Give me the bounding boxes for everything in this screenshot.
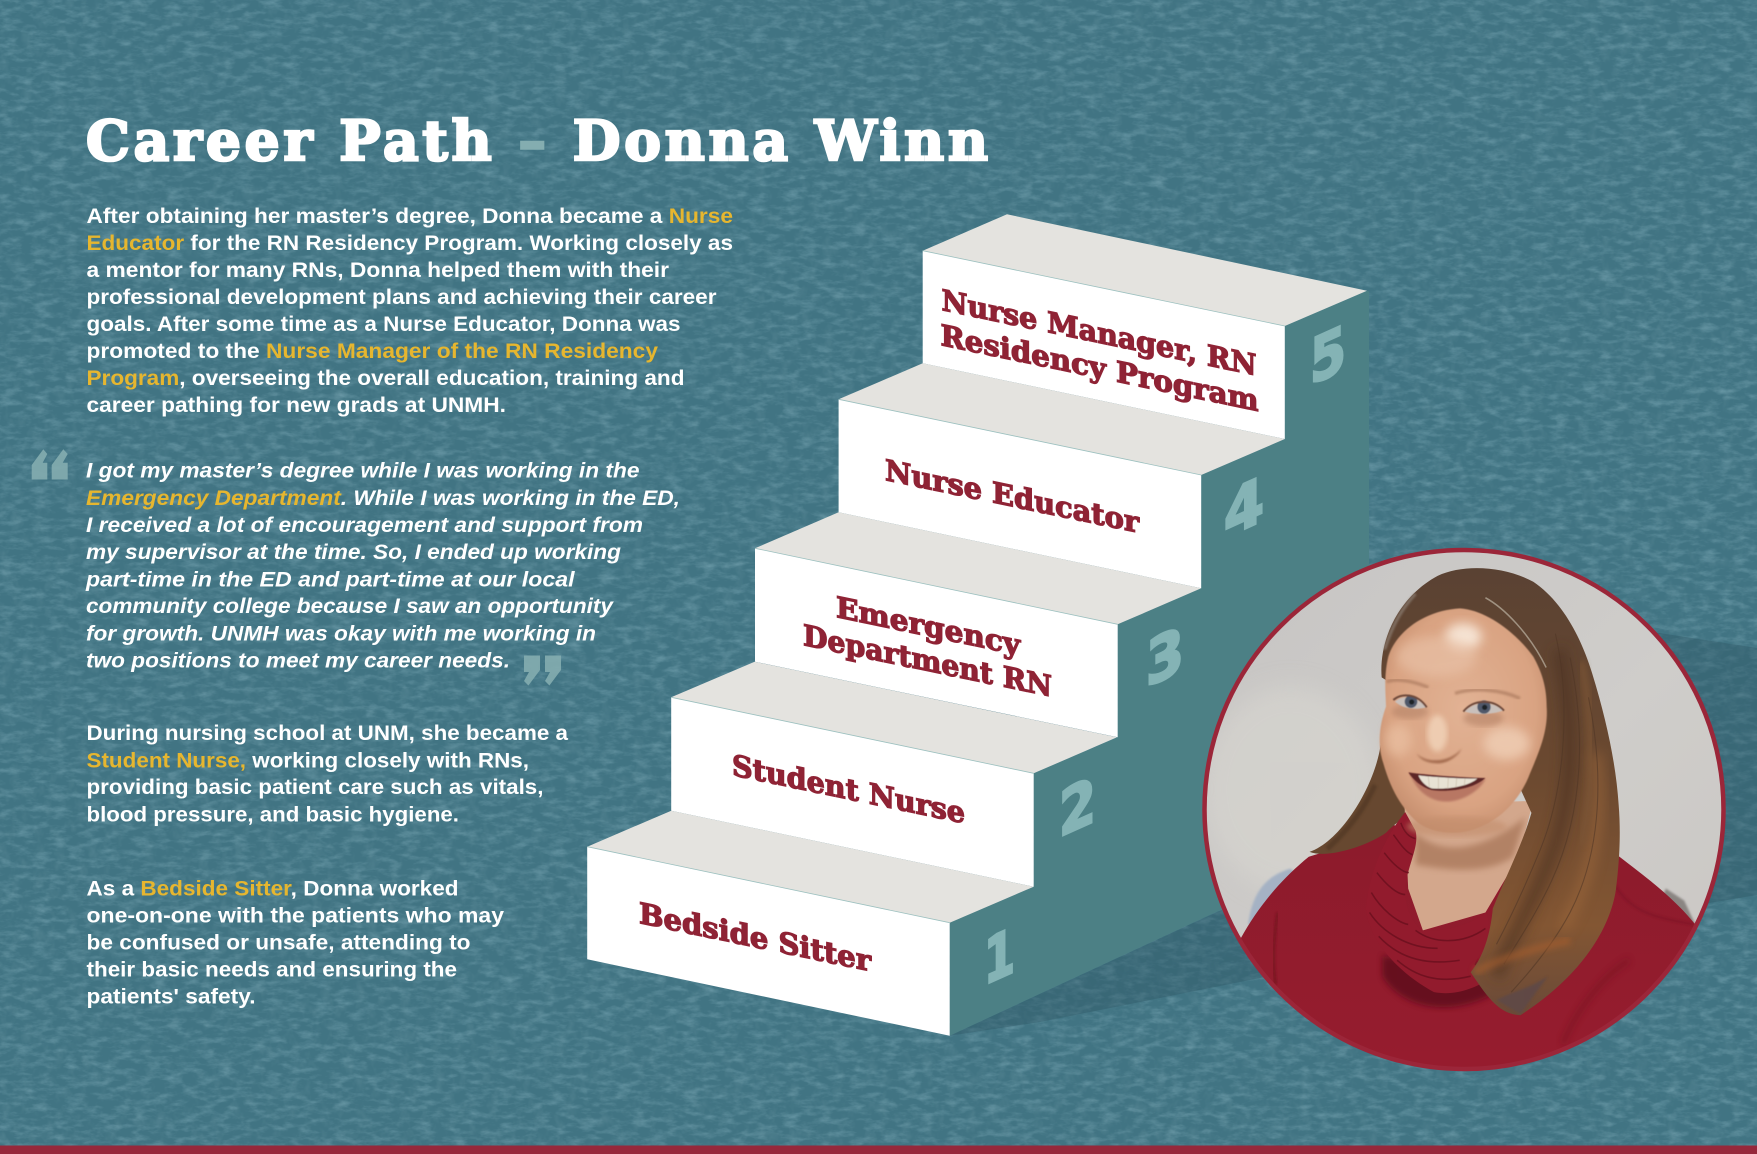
neck — [1404, 801, 1533, 930]
title: Career Path – Donna Winn — [86, 108, 988, 173]
text block: quote: Emergency Department . While I was working in the ED, — [86, 486, 680, 510]
text block: nurse manager and educator: After obtaining her master’s degree, Donna became a Nurse — [86, 204, 733, 228]
text block: nurse manager and educator: promoted to the Nurse Manager of the RN Residency — [86, 339, 658, 363]
text block: quote: two positions to meet my career needs. — [86, 648, 510, 672]
step 3: emergency department rn: 3 — [1146, 614, 1184, 702]
step 4: nurse educator: 4 — [1224, 464, 1264, 553]
staircase — [587, 214, 1369, 1036]
step 5: nurse manager — [923, 214, 1367, 439]
eyebrows — [1387, 680, 1428, 687]
step 2: student nurse: 2 — [1059, 764, 1096, 852]
stair cast shadow — [950, 590, 1757, 1036]
text block: bedside sitter: one-on-one with the patients who may — [86, 904, 504, 928]
text block: student nurse: providing basic patient care such as vitals, — [86, 775, 544, 799]
nose — [1427, 715, 1447, 752]
text block: quote: I got my master’s degree while I was working in the — [86, 458, 640, 482]
face — [1380, 608, 1547, 833]
text block: bedside sitter: be confused or unsafe, attending to — [86, 930, 470, 954]
text block: nurse manager and educator: Program, overseeing the overall education, training and — [86, 366, 684, 390]
text block: bedside sitter: their basic needs and ensuring the — [86, 958, 457, 982]
cowl neck — [1382, 956, 1500, 1007]
text block: quote: community college because I saw an opportunity — [86, 594, 614, 618]
text block: nurse manager and educator: Educator for the RN Residency Program. Working closely as — [86, 231, 733, 255]
step 4: nurse educator — [839, 363, 1285, 588]
step 2: student nurse: Student Nurse — [732, 747, 965, 830]
text block: bedside sitter — [86, 876, 504, 1008]
step 3: emergency department rn: Emergency — [836, 589, 1021, 662]
text block: quote — [85, 458, 680, 672]
text block: nurse manager and educator: goals. After some time as a Nurse Educator, Donna was — [86, 312, 681, 336]
step 5: nurse manager: Nurse Manager, RN — [942, 282, 1256, 382]
smile — [1409, 773, 1486, 802]
step 2: student nurse — [671, 662, 1117, 887]
text block: student nurse — [86, 721, 569, 826]
portrait photo of Donna Winn — [1200, 545, 1730, 1088]
step 4: nurse educator: Nurse Educator — [885, 452, 1140, 540]
hair — [1381, 568, 1620, 1015]
icon: closing quotation mark — [524, 656, 561, 686]
step 1: bedside sitter — [587, 811, 1034, 1036]
text block: bedside sitter: patients' safety. — [86, 984, 256, 1008]
text block: student nurse: blood pressure, and basic hygiene. — [86, 802, 459, 826]
text block: student nurse: During nursing school at UNM, she became a — [86, 721, 569, 745]
text block: quote: my supervisor at the time. So, I ended up working — [86, 540, 621, 564]
step 5: nurse manager: 5 — [1310, 313, 1346, 400]
step 5: nurse manager: Residency Program — [940, 317, 1258, 418]
eyes — [1392, 704, 1428, 719]
bottom bar — [0, 1146, 1757, 1154]
step 3: emergency department rn — [755, 512, 1201, 737]
text block: nurse manager and educator: a mentor for many RNs, Donna helped them with their — [86, 258, 670, 282]
text block: nurse manager and educator: career pathing for new grads at UNMH. — [86, 393, 506, 417]
text block: quote: I received a lot of encouragement and support from — [86, 513, 643, 537]
icon: opening quotation mark — [32, 449, 68, 480]
photo ring — [1204, 550, 1724, 1069]
text block: nurse manager and educator — [86, 204, 733, 417]
text block: quote: for growth. UNMH was okay with me working in — [86, 622, 596, 646]
step 3: emergency department rn: Department RN — [803, 617, 1052, 704]
step 1: bedside sitter: 1 — [984, 915, 1015, 1000]
stair side wall — [950, 291, 1369, 1036]
step 1: bedside sitter: Bedside Sitter — [639, 895, 872, 978]
text block: student nurse: Student Nurse, working closely with RNs, — [86, 748, 529, 772]
text block: nurse manager and educator: professional development plans and achieving their career — [86, 285, 717, 309]
text block: bedside sitter: As a Bedside Sitter , Donna worked — [86, 876, 458, 900]
text block: quote: part-time in the ED and part-time at our local — [85, 568, 576, 592]
